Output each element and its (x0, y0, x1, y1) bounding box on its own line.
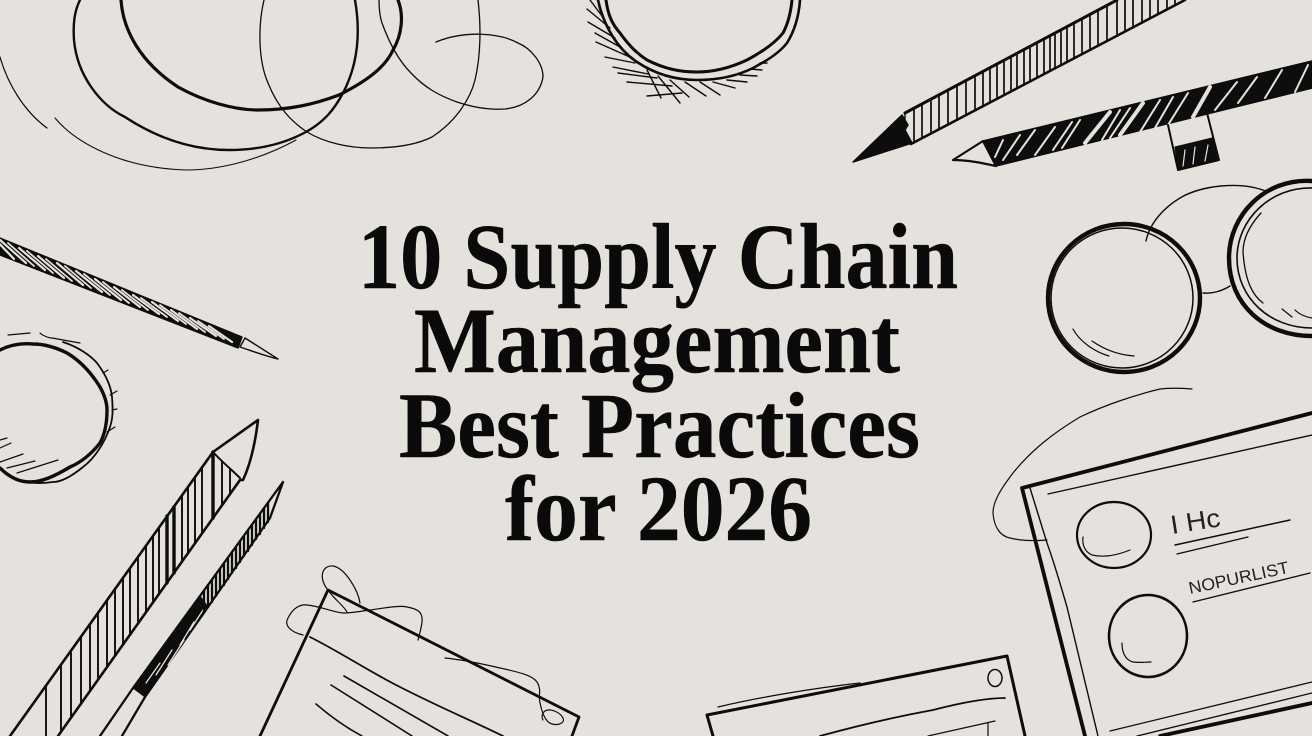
hatched pencil right (953, 61, 1312, 170)
pencil top right (853, 0, 1185, 162)
card bottom right: NOPURLIST (1187, 558, 1291, 598)
card bottom right: I Hc (1168, 502, 1222, 540)
title (358, 206, 958, 561)
title: Best Practices (399, 375, 920, 478)
hatched circle top centre (587, 0, 800, 103)
panel bottom centre (707, 656, 1025, 736)
card bottom right (993, 388, 1312, 736)
circle left (0, 333, 117, 483)
glasses right (1048, 181, 1312, 372)
title: 10 Supply Chain (358, 206, 958, 309)
pencil left (0, 236, 278, 359)
pencils bottom left (10, 420, 283, 736)
title: Management (414, 290, 900, 393)
notebook bottom centre (260, 566, 579, 736)
title: for 2026 (505, 458, 812, 561)
scribble circles top left (0, 0, 543, 170)
